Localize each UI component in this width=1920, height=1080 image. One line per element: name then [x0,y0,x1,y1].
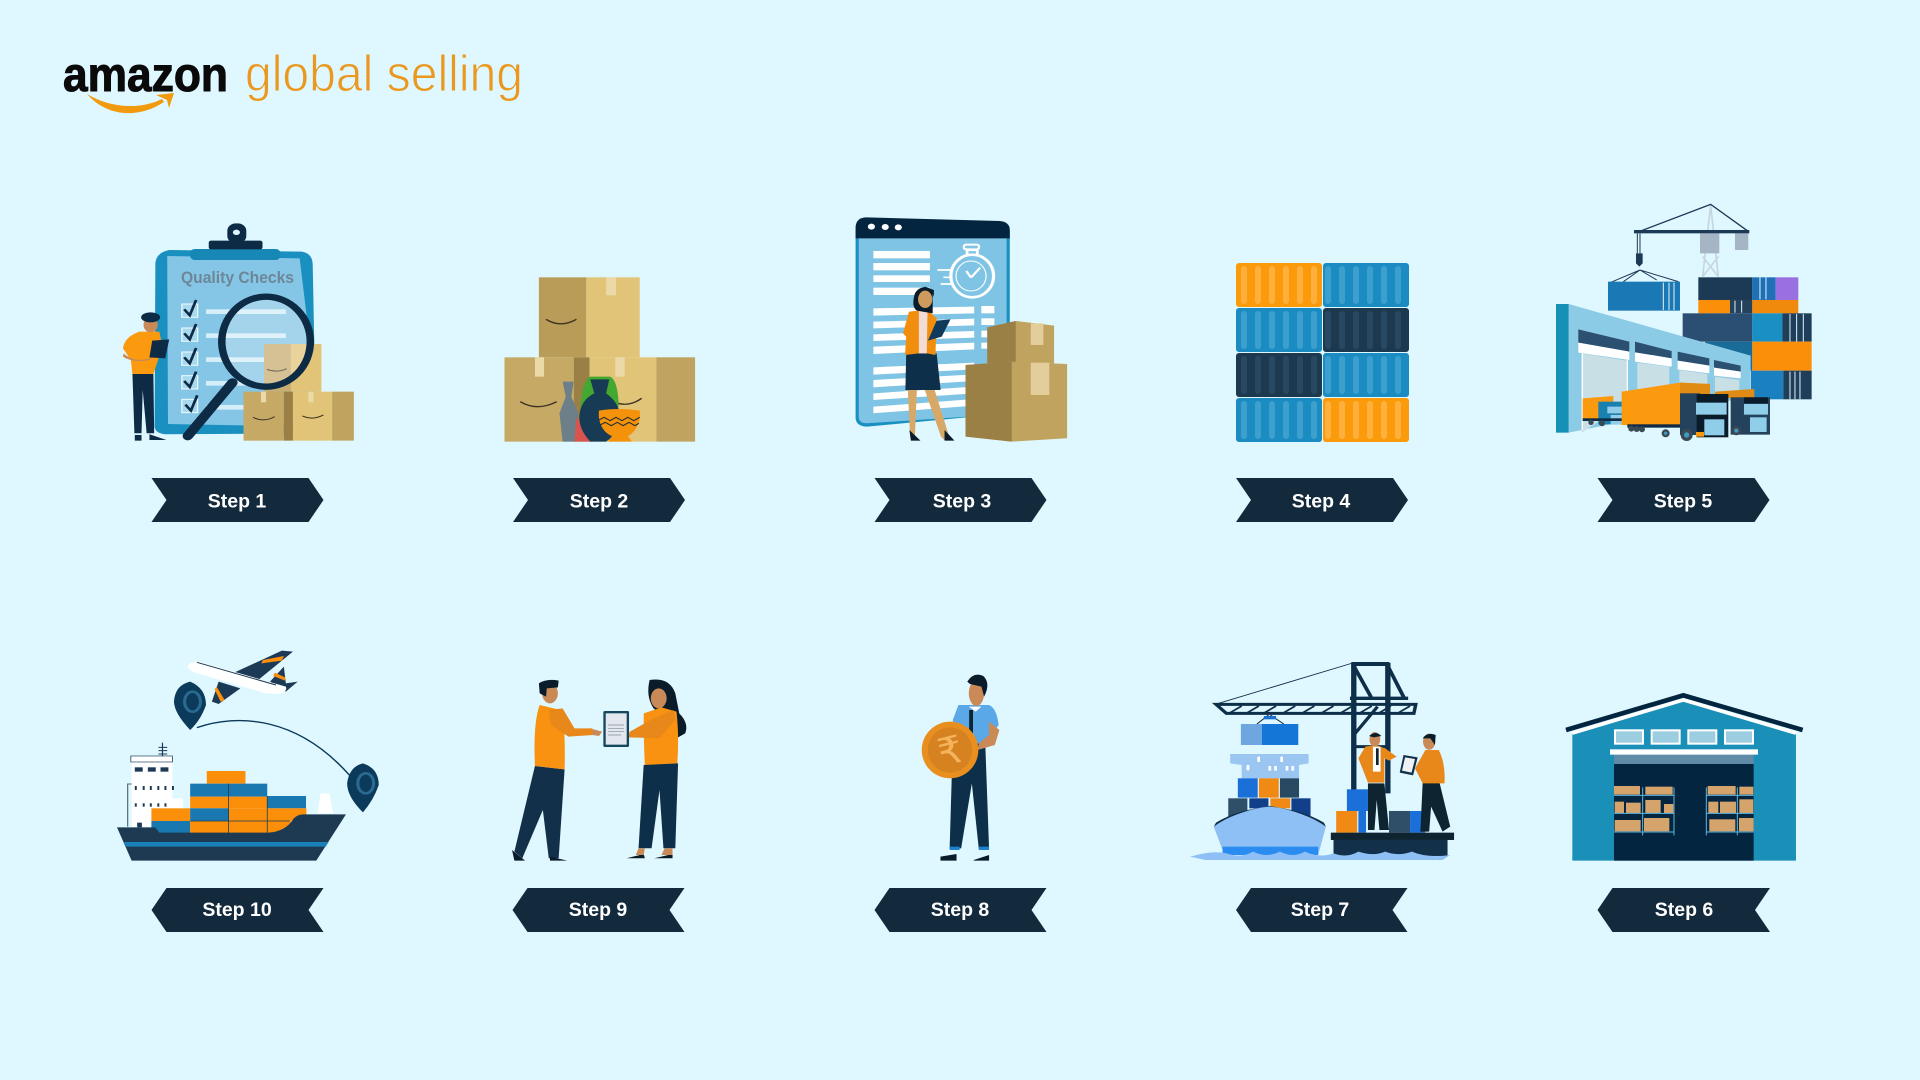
illustration: quality checks clipboard [123,223,354,441]
ribbon: Step 6: Step 6 [1655,899,1713,921]
illustration: man holding rupee coin [922,675,999,861]
panel: step 4 [1236,263,1409,522]
ribbon: Step 7: Step 7 [1291,899,1349,921]
illustration: port warehouse, crane and trucks [1556,204,1812,441]
ribbon: Step 9: Step 9 [569,899,627,921]
illustration: warehouse with shelves [1566,695,1803,861]
ribbon: Step 2 [513,478,685,522]
illustration: document window, woman and boxes [856,217,1067,442]
ribbon: Step 1 [152,478,324,522]
ribbon: Step 1: Step 1 [208,490,266,512]
ribbon: Step 3: Step 3 [933,490,991,512]
panel: step 3 [856,217,1067,522]
illustration: stacked containers [1236,263,1409,442]
illustration: boxes and handicraft vases [504,277,695,442]
clipboard title: Quality Checks [181,268,294,287]
panel: step 5 [1556,204,1812,522]
logo: amazon global selling [63,45,523,113]
ribbon: Step 6 [1598,888,1770,932]
illustration: dock crane, ship and workers [1190,663,1454,860]
ribbon: Step 7 [1236,888,1408,932]
rupee symbol on coin: ₹ [933,727,967,775]
ribbon: Step 8: Step 8 [931,899,989,921]
logo: amazon global selling: global selling [245,45,523,102]
ribbon: Step 3 [874,478,1046,522]
ribbon: Step 4 [1236,478,1408,522]
illustration: cargo ship, plane and map pins [117,651,379,861]
logo: amazon global selling: amazon [63,49,228,102]
panel: step 7 [1190,663,1454,932]
ribbon: Step 2: Step 2 [570,490,628,512]
panel: step 8 [874,675,1046,932]
ribbon: Step 5 [1598,478,1770,522]
illustration: two people exchanging a contract [512,679,686,861]
ribbon: Step 4: Step 4 [1292,490,1350,512]
panel: step 1 [123,223,354,522]
panel: step 10 [117,651,379,932]
panel: step 9 [512,679,686,932]
ribbon: Step 9 [512,888,684,932]
ribbon: Step 5: Step 5 [1654,490,1712,512]
panel: step 6 [1566,695,1803,932]
ribbon: Step 10 [152,888,324,932]
ribbon: Step 8 [874,888,1046,932]
panel: step 2 [504,277,695,522]
ribbon: Step 10: Step 10 [202,899,272,921]
